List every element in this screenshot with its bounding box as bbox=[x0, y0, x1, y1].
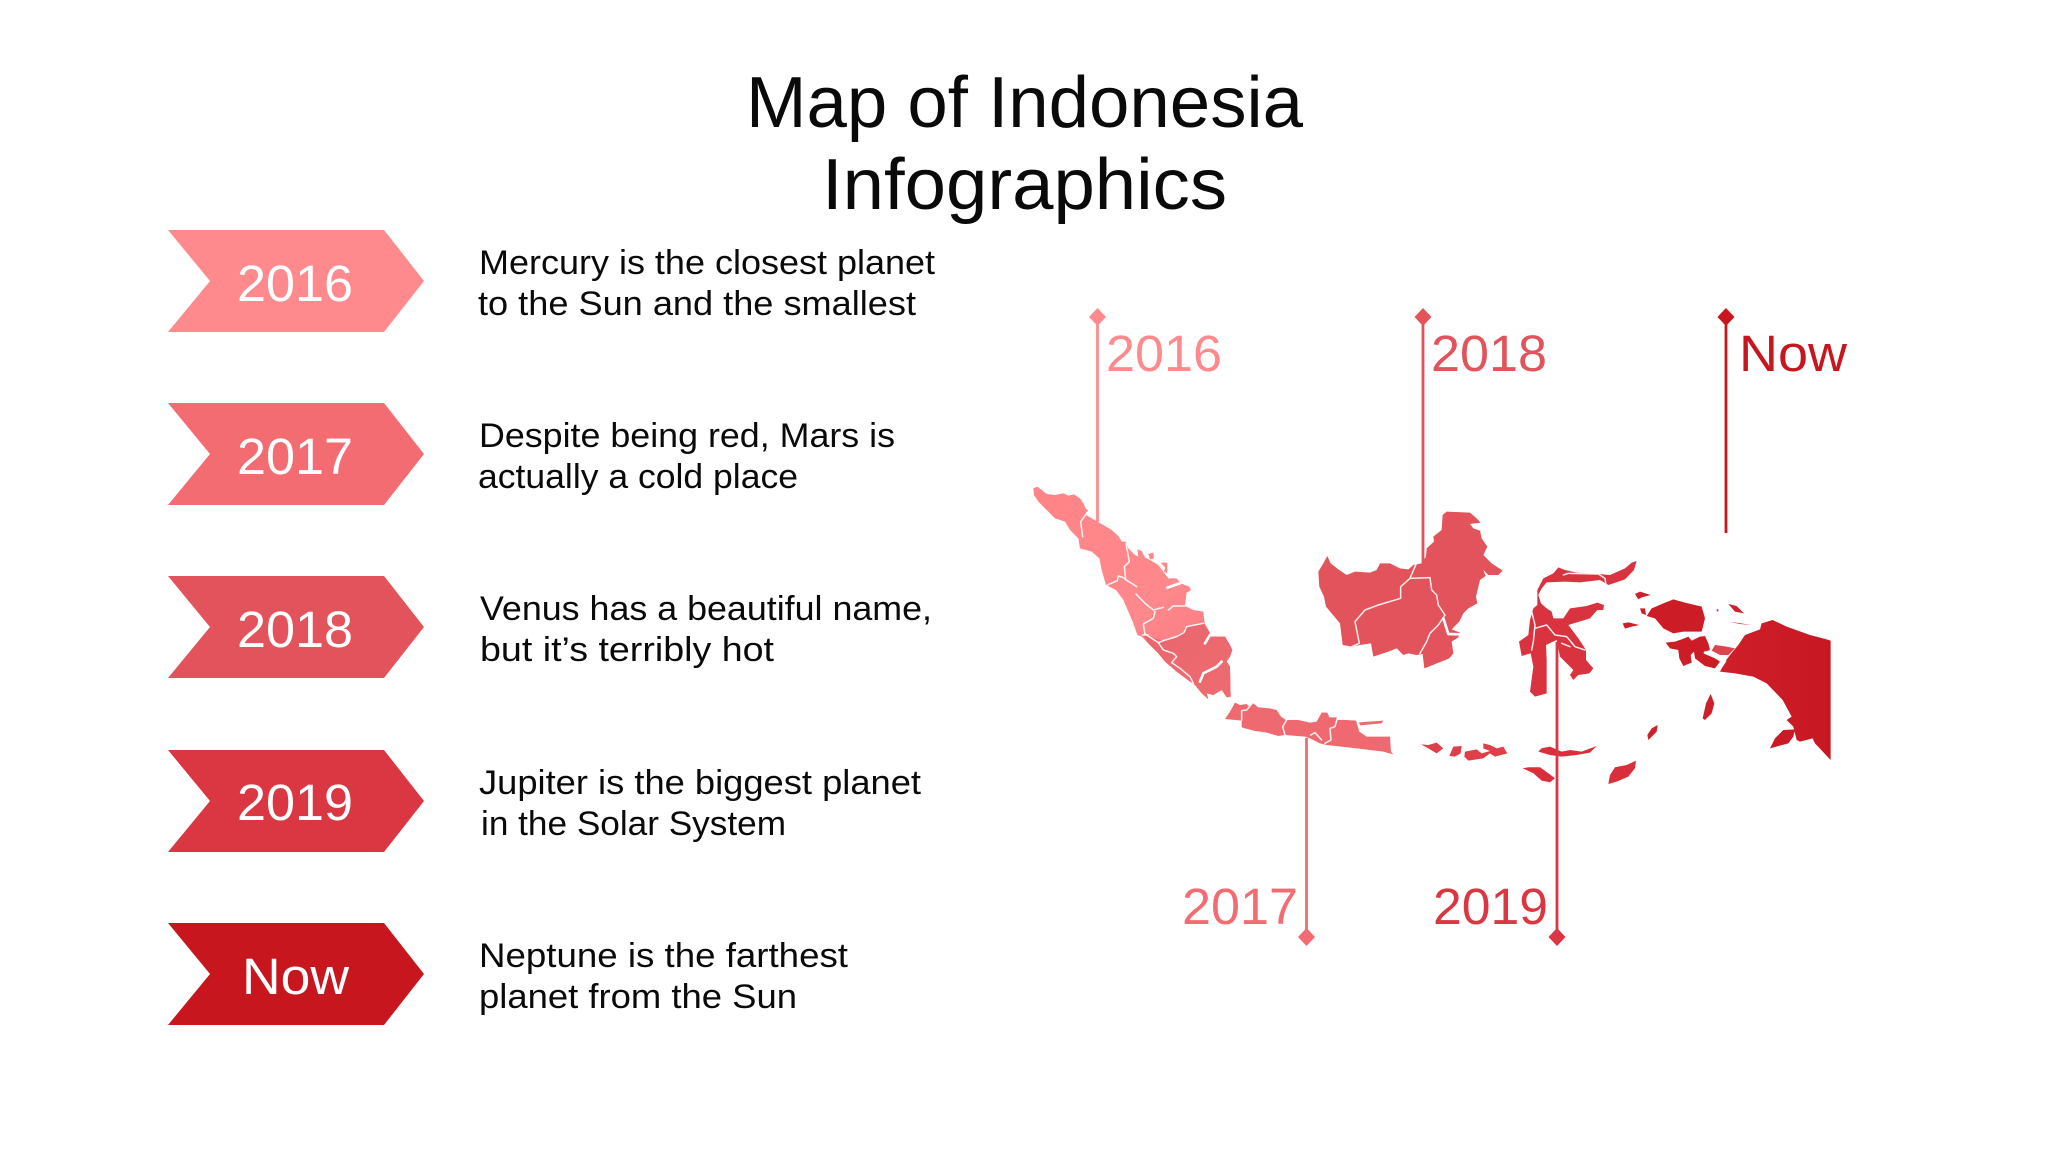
title: Map of Indonesia bbox=[746, 63, 1304, 143]
Sulawesi bbox=[1519, 561, 1637, 697]
arrow label: 2016 bbox=[168, 230, 424, 332]
text block: 2016 description: to the Sun and the smallest bbox=[478, 285, 917, 323]
arrow label: 2018 bbox=[168, 576, 424, 678]
arrow label: Now: Now bbox=[242, 948, 349, 1005]
title: Infographics bbox=[822, 145, 1227, 225]
map callout: 2019 bbox=[1433, 642, 1566, 946]
text block: 2018 description: but it’s terribly hot bbox=[480, 631, 775, 669]
panel: timeline list bbox=[168, 230, 936, 1025]
text block: 2018 description bbox=[480, 590, 932, 669]
arrow label: 2019 bbox=[168, 750, 424, 852]
Java bbox=[1225, 703, 1393, 754]
Papua bbox=[1647, 599, 1831, 760]
map callout: 2018: 2018 bbox=[1431, 325, 1547, 382]
text block: 2017 description: actually a cold place bbox=[478, 458, 798, 496]
map callout: 2019: 2019 bbox=[1433, 878, 1548, 935]
map of Indonesia bbox=[1033, 487, 1831, 784]
arrow label: 2016: 2016 bbox=[237, 255, 353, 312]
text block: 2016 description: Mercury is the closest planet bbox=[479, 244, 936, 282]
title bbox=[746, 63, 1304, 225]
text block: Now description bbox=[479, 937, 849, 1016]
text block: Now description: Neptune is the farthest bbox=[479, 937, 849, 975]
text block: 2019 description: in the Solar System bbox=[481, 805, 786, 843]
arrow label: 2018: 2018 bbox=[237, 601, 353, 658]
text block: 2018 description: Venus has a beautiful name, bbox=[480, 590, 932, 628]
map callout: 2017 bbox=[1182, 738, 1315, 946]
map callout: 2018 bbox=[1414, 308, 1547, 566]
text block: 2017 description bbox=[478, 417, 895, 496]
map callout: 2016 bbox=[1089, 308, 1222, 522]
map callout: Now bbox=[1718, 308, 1847, 533]
Maluku and southern islands bbox=[1523, 592, 1752, 784]
text block: 2017 description: Despite being red, Mars is bbox=[479, 417, 895, 455]
Kalimantan bbox=[1318, 512, 1503, 668]
text block: 2016 description bbox=[478, 244, 936, 323]
arrow label: 2017 bbox=[168, 403, 424, 505]
text block: 2019 description: Jupiter is the biggest planet bbox=[479, 764, 922, 802]
map callout: 2017: 2017 bbox=[1182, 878, 1298, 935]
Sumatra bbox=[1033, 487, 1232, 699]
text block: Now description: planet from the Sun bbox=[479, 978, 797, 1016]
arrow label: Now bbox=[168, 923, 424, 1025]
arrow label: 2019: 2019 bbox=[237, 774, 353, 831]
text block: 2019 description bbox=[479, 764, 922, 843]
map callout: 2016: 2016 bbox=[1106, 325, 1222, 382]
Bali and Nusa Tenggara bbox=[1421, 743, 1507, 761]
arrow label: 2017: 2017 bbox=[237, 428, 353, 485]
map callout: Now: Now bbox=[1739, 325, 1847, 382]
